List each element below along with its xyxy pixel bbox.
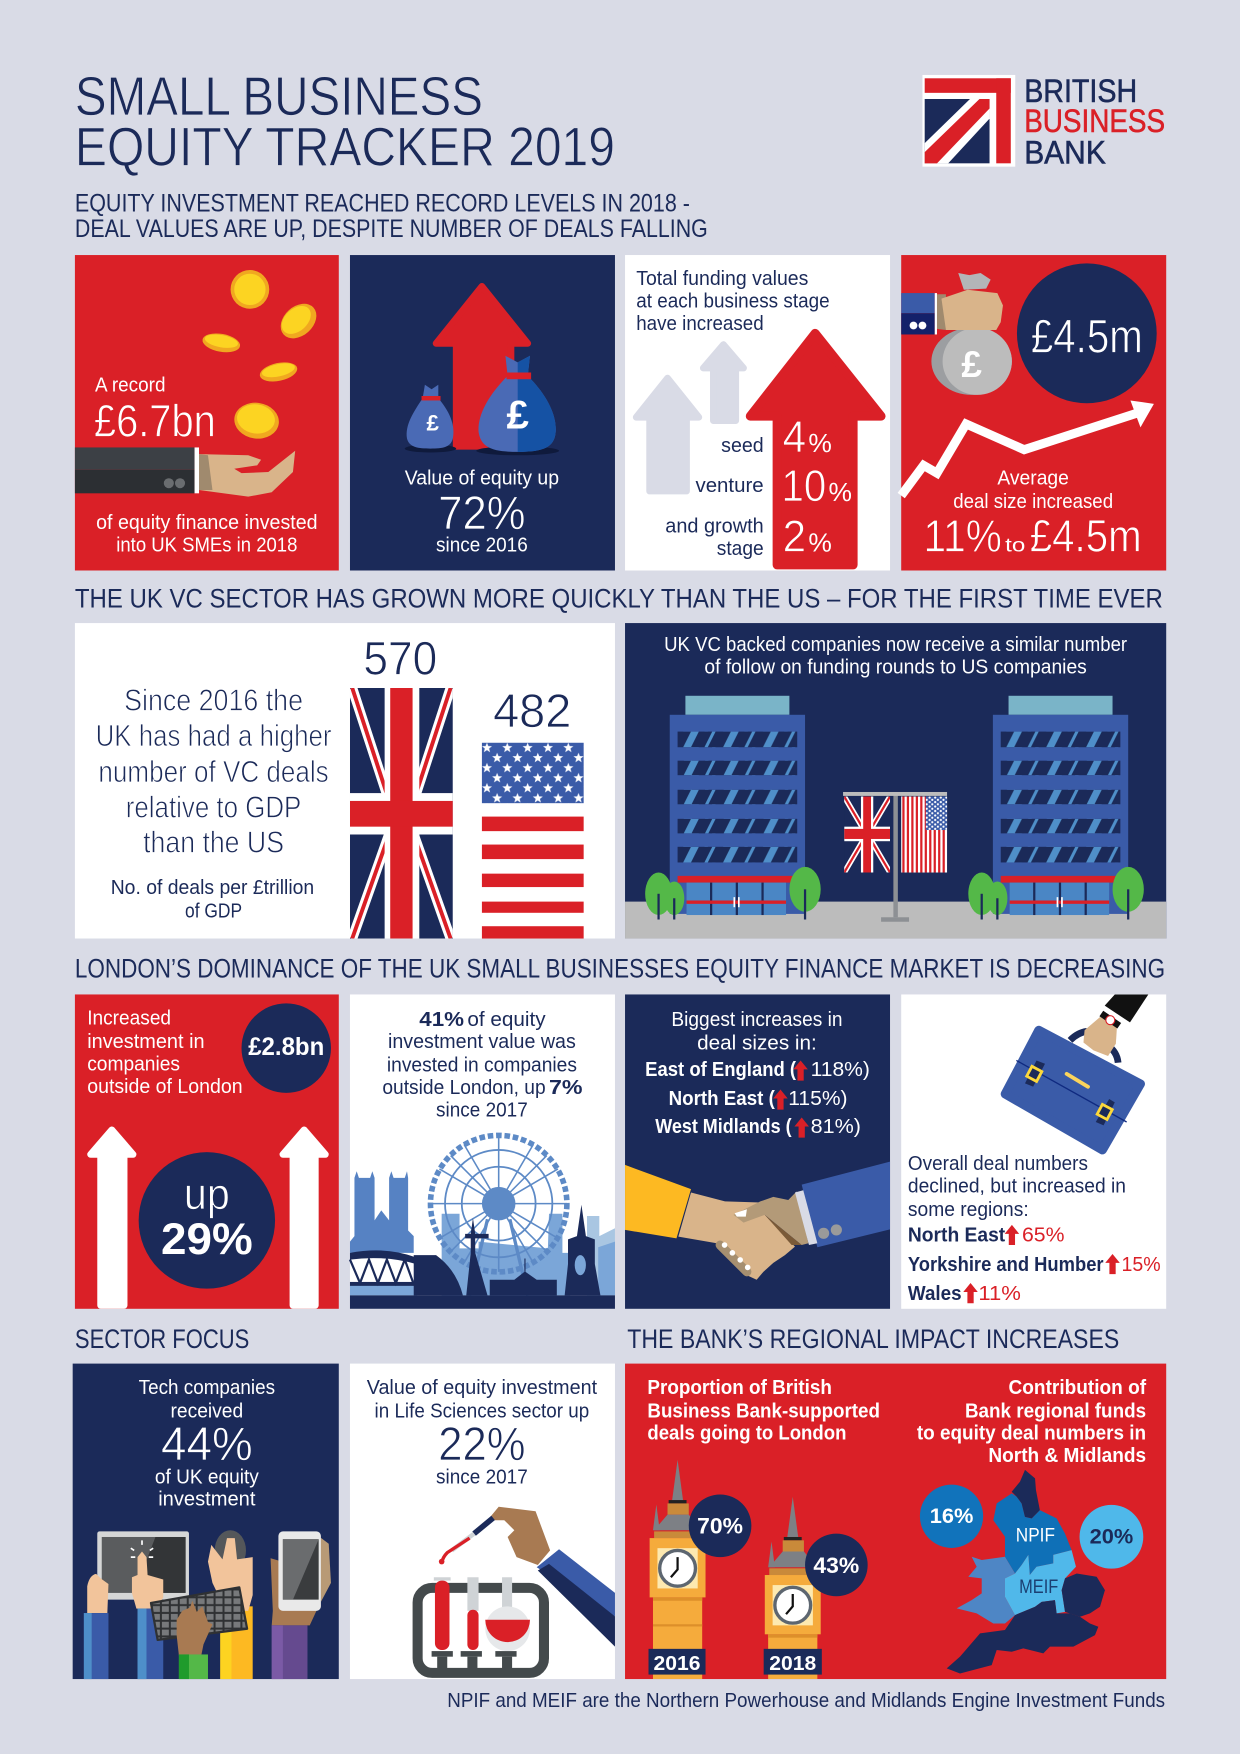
subtitle	[75, 190, 708, 243]
text: 41% of equity: 7%	[549, 1077, 583, 1099]
text: increased investment: investment in	[87, 1031, 205, 1053]
text: value of equity up 72% since 2016: 72%	[438, 486, 526, 539]
callout: up 29%: up	[184, 1170, 230, 1219]
text: tech companies 44%: Tech companies	[139, 1377, 275, 1399]
icon: falling coins	[201, 270, 323, 442]
text: overall deal numbers: Overall deal numbers	[908, 1153, 1088, 1175]
text: since 2016: number of VC deals	[98, 756, 329, 789]
text: proportion going to London: Business Bank-supported	[647, 1400, 880, 1422]
map: England and Wales regions: NPIF	[1016, 1525, 1055, 1546]
icon: hand with money bag	[901, 273, 1012, 395]
subtitle: EQUITY INVESTMENT REACHED RECORD LEVELS IN 2018 -	[75, 190, 690, 217]
panel: 41% of equity investment value	[350, 994, 615, 1309]
icon: money bags	[405, 356, 559, 455]
text: tech companies 44%	[139, 1377, 275, 1511]
text: stage labels	[665, 435, 764, 560]
text: since 2016: than the US	[143, 826, 284, 859]
callout: £2.8bn: £2.8bn	[248, 1034, 324, 1061]
text: proportion going to London: deals going to London	[647, 1423, 846, 1445]
text: follow on funding rounds: of follow on funding rounds to US companies	[704, 656, 1087, 678]
text: no. of deals per £trillion of GDP	[111, 877, 314, 922]
map: England and Wales regions: MEIF	[1019, 1577, 1058, 1598]
text: stage percentages: %	[829, 479, 852, 507]
icon: money bags: £	[506, 392, 529, 437]
text: A record £6.7bn	[94, 375, 216, 446]
text: contribution of regional funds	[917, 1377, 1146, 1467]
heading: regional impact: THE BANK’S REGIONAL IMPACT INCREASES	[627, 1324, 1119, 1354]
panel: VC deals relative to GDP	[75, 623, 615, 939]
text: total funding values: at each business stage	[636, 291, 830, 313]
text: value of equity up 72% since 2016: Value of equity up	[405, 467, 559, 489]
title: EQUITY TRACKER 2019	[75, 116, 615, 178]
text: stage percentages: 10	[782, 462, 826, 511]
text: Wales 11%: 11%	[978, 1283, 1021, 1305]
icon: hand with money bag: £	[961, 344, 982, 385]
panel: life sciences	[350, 1364, 615, 1679]
icon: Big Ben 2018	[764, 1497, 822, 1679]
panel: total funding values	[625, 255, 890, 570]
icon: right office building	[968, 696, 1144, 920]
panel: average deal size	[901, 255, 1166, 570]
text: 41% of equity: 41%	[419, 1009, 464, 1031]
panel: value of equity up 72%	[350, 255, 615, 570]
text: overall deal numbers: declined, but increased in	[908, 1175, 1126, 1197]
logo: British Business Bank: BANK	[1024, 134, 1106, 170]
number: UK 570: 570	[363, 632, 437, 685]
number: US 482: 482	[493, 684, 571, 737]
callout: 43%	[805, 1534, 868, 1596]
icon: handshake	[625, 1162, 890, 1280]
text: contribution of regional funds: Bank regional funds	[965, 1400, 1146, 1422]
icon: Big Ben 2018: 2018	[769, 1653, 816, 1675]
text: 41% of equity: investment value was	[388, 1031, 576, 1053]
callout: £2.8bn	[242, 1003, 331, 1093]
text: increased investment: companies	[87, 1054, 180, 1076]
text: contribution of regional funds: North & Midlands	[988, 1445, 1146, 1467]
text: North East 65%: North East	[908, 1225, 1005, 1247]
text: since 2016: UK has had a higher	[96, 720, 332, 753]
text: North East 65%: 65%	[1022, 1225, 1065, 1247]
panel: follow on funding	[625, 623, 1166, 939]
text: follow on funding rounds	[664, 634, 1127, 678]
panel: overall deal numbers	[901, 994, 1166, 1309]
logo: British Business Bank	[922, 73, 1165, 170]
text: stage percentages: 4	[783, 413, 806, 462]
text: proportion going to London	[647, 1377, 880, 1445]
text: stage percentages: %	[808, 430, 832, 458]
text: of equity finance invested	[96, 512, 318, 556]
text: increased investment	[87, 1008, 243, 1098]
callout: 43%: 43%	[813, 1553, 859, 1578]
text: no. of deals per £trillion of GDP: of GDP	[185, 900, 242, 922]
text: Wales 11%: Wales	[908, 1283, 962, 1305]
text: increased investment: Increased	[87, 1008, 171, 1030]
callout: 70%: 70%	[697, 1514, 743, 1539]
icon: open hand with sleeve	[75, 447, 295, 497]
icon: hand holding briefcase	[1005, 994, 1148, 1150]
text: North East: 115%)	[788, 1088, 848, 1110]
icon: rising zig-zag arrow	[901, 400, 1154, 496]
text: 41% of equity: since 2017	[436, 1099, 528, 1121]
text: East of England: East of England (	[645, 1059, 796, 1081]
panel: biggest increases in deal sizes	[625, 994, 890, 1309]
title	[75, 65, 615, 178]
text: North East: North East (	[669, 1088, 775, 1110]
bar: UK flag	[350, 688, 453, 939]
callout: 16%: 16%	[930, 1504, 973, 1528]
text: North East 65%	[908, 1225, 1065, 1247]
text: stage labels: seed	[721, 435, 764, 457]
callout: £4.5m: £4.5m	[1031, 309, 1143, 362]
text: since 2016	[96, 684, 332, 859]
panel: tech companies	[73, 1364, 339, 1679]
text: biggest increases	[671, 1009, 843, 1054]
text: stage labels: and growth	[665, 515, 764, 537]
text: value of equity investment in life sciences: 22%	[438, 1417, 526, 1470]
icon: left office building	[645, 696, 821, 920]
text: Yorkshire and Humber 15%: 15%	[1121, 1254, 1161, 1276]
text: 41% of equity: of equity	[467, 1009, 547, 1031]
text: proportion going to London: Proportion of British	[647, 1377, 832, 1399]
text: stage percentages	[782, 413, 852, 561]
text: value of equity up 72% since 2016	[405, 467, 559, 556]
text: follow on funding rounds: UK VC backed companies now receive a similar number	[664, 634, 1127, 656]
map: England and Wales regions	[947, 1470, 1105, 1673]
text: Yorkshire and Humber 15%: Yorkshire and Humber	[908, 1254, 1104, 1276]
text: value of equity investment in life sciences: since 2017	[436, 1466, 528, 1488]
text: contribution of regional funds: to equity deal numbers in	[917, 1423, 1146, 1445]
callout: £4.5m	[1017, 263, 1157, 403]
logo: British Business Bank: BRITISH	[1024, 73, 1137, 109]
title: SMALL BUSINESS	[75, 65, 483, 127]
text: average deal size increased: deal size increased	[953, 491, 1113, 513]
text: total funding values: have increased	[636, 313, 764, 335]
text: overall deal numbers: some regions:	[908, 1199, 1029, 1221]
text: tech companies 44%: received	[171, 1400, 243, 1422]
text: value of equity up 72% since 2016: since 2016	[436, 534, 528, 556]
panel: investment outside of London	[75, 994, 339, 1309]
bar: US flag	[482, 743, 584, 939]
text: contribution of regional funds: Contribution of	[1009, 1377, 1146, 1399]
icon: large red arrow	[750, 333, 881, 565]
heading: sector focus: SECTOR FOCUS	[75, 1324, 249, 1354]
text: stage labels: venture	[695, 475, 764, 497]
icon: London skyline with wheel	[350, 1135, 615, 1309]
callout: 16%	[920, 1485, 983, 1548]
text: biggest increases: Biggest increases in	[671, 1009, 843, 1031]
icon: hands using devices	[84, 1530, 331, 1679]
text: increased investment: outside of London	[87, 1076, 243, 1098]
footnote: NPIF and MEIF are the Northern Powerhouse and Midlands Engine Investment Funds	[447, 1690, 1165, 1712]
callout: up 29%: 29%	[161, 1215, 253, 1264]
logo: British Business Bank: BUSINESS	[1024, 103, 1165, 139]
text: stage labels: stage	[717, 538, 764, 560]
text: stage percentages: 2	[783, 512, 806, 561]
icon: Big Ben 2016	[649, 1460, 706, 1681]
text: value of equity investment in life sciences	[367, 1377, 597, 1488]
text: since 2016: relative to GDP	[126, 792, 301, 825]
text: A record £6.7bn: £6.7bn	[94, 394, 216, 446]
icon: red up arrow	[436, 286, 528, 446]
subtitle: DEAL VALUES ARE UP, DESPITE NUMBER OF DEALS FALLING	[75, 216, 708, 243]
text: average deal size increased: £4.5m	[1030, 509, 1142, 561]
text: average deal size increased: Average	[997, 467, 1069, 489]
callout: up 29%	[139, 1152, 275, 1289]
text: 41% of equity: invested in companies	[387, 1055, 577, 1077]
text: overall deal numbers	[908, 1153, 1126, 1221]
text: Wales 11%	[908, 1283, 1021, 1305]
text: of equity finance invested: of equity finance invested	[96, 512, 318, 534]
icon: white up arrows	[91, 1130, 325, 1305]
text: no. of deals per £trillion of GDP: No. of deals per £trillion	[111, 877, 314, 899]
panel: record £6.7bn	[75, 255, 339, 570]
text: West Midlands: 81%)	[811, 1116, 861, 1138]
text: North East	[669, 1088, 848, 1110]
text: value of equity investment in life sciences: in Life Sciences sector up	[375, 1400, 589, 1422]
text: 41% of equity	[382, 1009, 583, 1121]
text: tech companies 44%: 44%	[161, 1417, 253, 1470]
text: average deal size increased: 11%	[924, 509, 1002, 561]
text: East of England: 118%)	[811, 1059, 870, 1081]
text: biggest increases: deal sizes in:	[697, 1032, 817, 1054]
text: value of equity investment in life sciences: Value of equity investment	[367, 1377, 597, 1399]
text: average deal size increased	[924, 467, 1142, 561]
callout: 20%	[1080, 1505, 1143, 1569]
text: of equity finance invested: into UK SMEs in 2018	[116, 534, 297, 556]
text: West Midlands: West Midlands (	[655, 1116, 792, 1138]
callout: 70%	[689, 1494, 751, 1557]
panel: regional impact	[625, 1364, 1166, 1680]
callout: 20%: 20%	[1090, 1525, 1133, 1549]
text: total funding values	[636, 268, 830, 335]
icon: Big Ben 2016: 2016	[654, 1653, 701, 1675]
icon: money bags: £	[426, 411, 439, 436]
icon: flag pole with flags	[843, 792, 947, 922]
icon: test tube rack	[418, 1577, 544, 1673]
text: since 2016: Since 2016 the	[124, 684, 303, 717]
text: total funding values: Total funding values	[636, 268, 808, 290]
icon: grey up arrows	[636, 345, 744, 491]
icon: pipette and hand	[439, 1507, 615, 1647]
text: tech companies 44%: of UK equity	[155, 1466, 260, 1488]
text: average deal size increased: to	[1005, 535, 1025, 556]
text: tech companies 44%: investment	[158, 1489, 256, 1511]
text: A record £6.7bn: A record	[95, 375, 165, 397]
text: stage percentages: %	[808, 529, 832, 557]
text: 41% of equity: outside London, up	[382, 1077, 546, 1099]
